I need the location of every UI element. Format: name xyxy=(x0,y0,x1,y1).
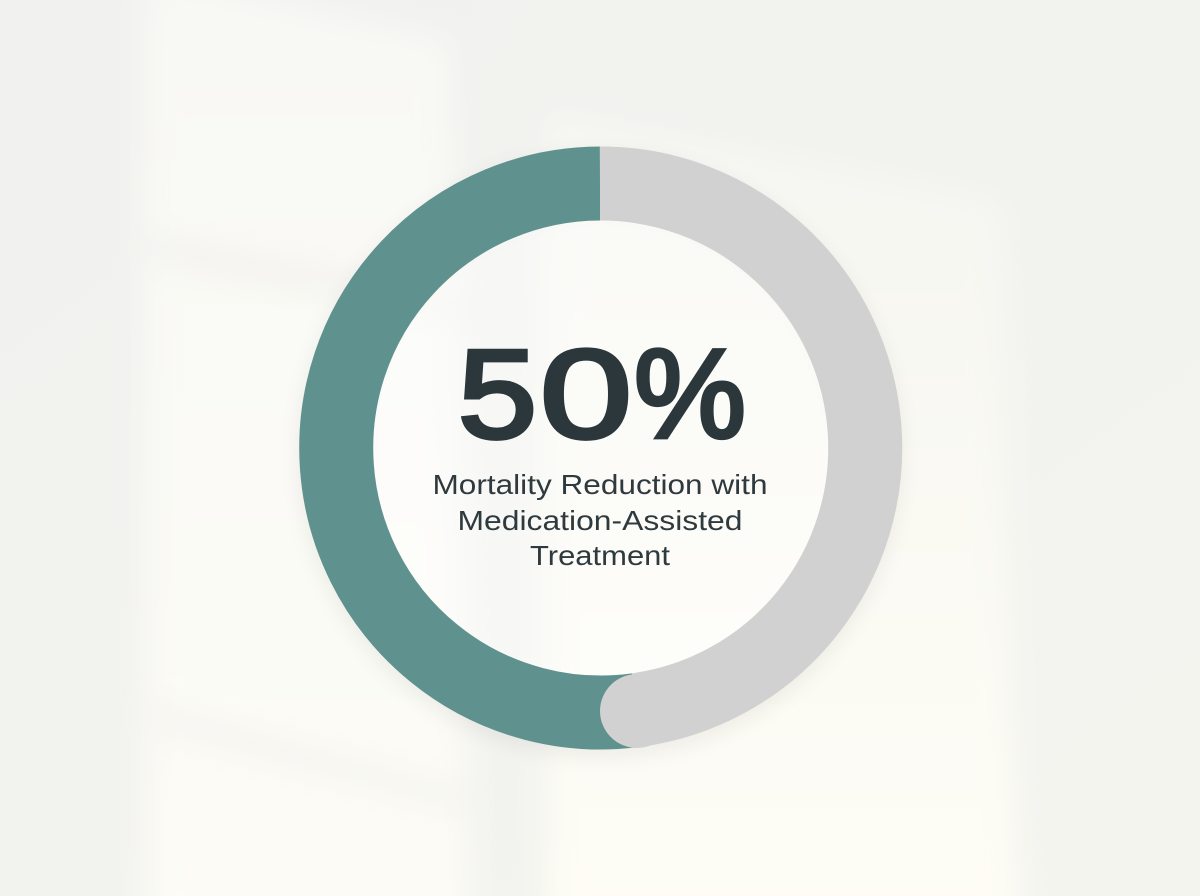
caption: Mortality Reduction with xyxy=(432,469,768,500)
big statistic: % xyxy=(634,324,746,464)
ring track: remaining 50% xyxy=(600,183,865,710)
rounded end cap of grey track xyxy=(600,674,674,748)
big statistic: 0 xyxy=(540,324,632,464)
donut chart: 50% xyxy=(336,183,865,748)
drop shadow of ring xyxy=(328,183,872,727)
caption xyxy=(432,469,768,571)
caption: Treatment xyxy=(530,540,670,571)
big statistic: 5 xyxy=(458,324,537,464)
caption: Medication-Assisted xyxy=(458,505,742,536)
inner circle background xyxy=(368,216,832,680)
ring segment: 50% teal xyxy=(336,184,637,712)
